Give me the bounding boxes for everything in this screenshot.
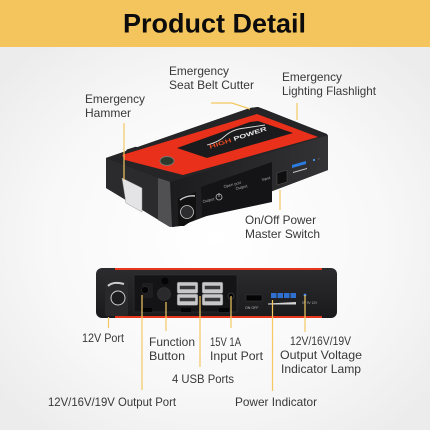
label: flashlight: Emergency	[282, 70, 342, 84]
line: power switch	[279, 190, 281, 210]
label: seat belt cutter: Emergency	[169, 64, 229, 78]
LED label bar	[293, 168, 307, 173]
back edge bumps	[126, 111, 244, 154]
input port	[228, 293, 234, 299]
callout lines	[108, 103, 305, 391]
flashlight lens	[122, 178, 142, 212]
label: input port: 15V 1A	[210, 335, 241, 349]
label: output port: 12V/16V/19V Output Port	[48, 395, 177, 409]
power icon	[216, 193, 222, 200]
line: function button	[165, 302, 167, 331]
panel labels: Output	[202, 196, 216, 204]
header banner	[0, 0, 430, 47]
line: hammer	[123, 123, 125, 180]
line: USB ports	[199, 296, 201, 367]
label: input port: Input Port	[210, 349, 264, 363]
product image: jump starter top view	[106, 107, 328, 227]
control panel	[201, 162, 272, 217]
side body	[96, 268, 337, 318]
power LEDs	[271, 293, 296, 298]
label: 12V port: 12V Port	[82, 331, 125, 345]
12V output port	[142, 283, 153, 298]
power indicator LEDs	[292, 161, 306, 168]
label: power switch: On/Off Power	[245, 213, 316, 227]
label: flashlight: Lighting Flashlight	[282, 84, 377, 98]
voltage lamp: 5V 9V 12V	[302, 301, 318, 305]
grey corner strip	[158, 178, 178, 227]
panel tabs	[143, 308, 229, 312]
label: function button: Button	[149, 349, 185, 363]
line: power indicator	[272, 300, 274, 391]
voltage LEDs	[313, 158, 320, 161]
on off switch	[245, 295, 262, 310]
red top panel	[122, 114, 318, 175]
label: USB ports: 4 USB Ports	[172, 372, 234, 386]
right front face	[170, 135, 328, 227]
label: hammer: Hammer	[85, 106, 131, 120]
start button block	[105, 278, 128, 316]
port panel	[134, 275, 237, 312]
top cover	[106, 107, 328, 182]
title: Product Detail	[123, 8, 306, 38]
LED bar	[268, 302, 296, 304]
panel labels: Output	[235, 183, 249, 191]
left front face	[106, 158, 170, 227]
car logo	[207, 125, 265, 145]
panel labels	[202, 175, 272, 204]
start button	[178, 192, 196, 226]
black logo plate	[177, 121, 293, 158]
label: power indicator: Power Indicator	[235, 395, 317, 409]
brand text: HIGH POWER	[209, 126, 269, 151]
on off switch: ON OFF	[245, 306, 259, 310]
line: 12V port	[108, 317, 110, 328]
label: hammer: Emergency	[85, 92, 145, 106]
label: function button: Function	[149, 335, 195, 349]
function button	[158, 278, 170, 300]
voltage lamp	[302, 294, 318, 305]
device body	[106, 107, 328, 227]
bottom red strip	[115, 316, 322, 318]
line: output port	[141, 295, 143, 390]
label: voltage lamp: Indicator Lamp	[281, 362, 361, 376]
panel labels: Input	[261, 175, 272, 182]
line: input port	[230, 296, 232, 328]
compass	[160, 156, 174, 166]
line: voltage lamp	[304, 295, 306, 332]
panel labels: Open port	[223, 180, 242, 189]
product image: jump starter side view	[96, 268, 337, 318]
line: seat belt cutter	[211, 103, 250, 109]
label: seat belt cutter: Seat Belt Cutter	[169, 78, 254, 92]
USB ports	[177, 282, 223, 306]
label: voltage lamp: Output Voltage	[280, 348, 362, 362]
top red strip	[115, 268, 322, 270]
label: voltage lamp: 12V/16V/19V	[290, 334, 351, 348]
line: flashlight	[296, 103, 298, 120]
power switch	[277, 170, 287, 185]
label: power switch: Master Switch	[245, 227, 320, 241]
